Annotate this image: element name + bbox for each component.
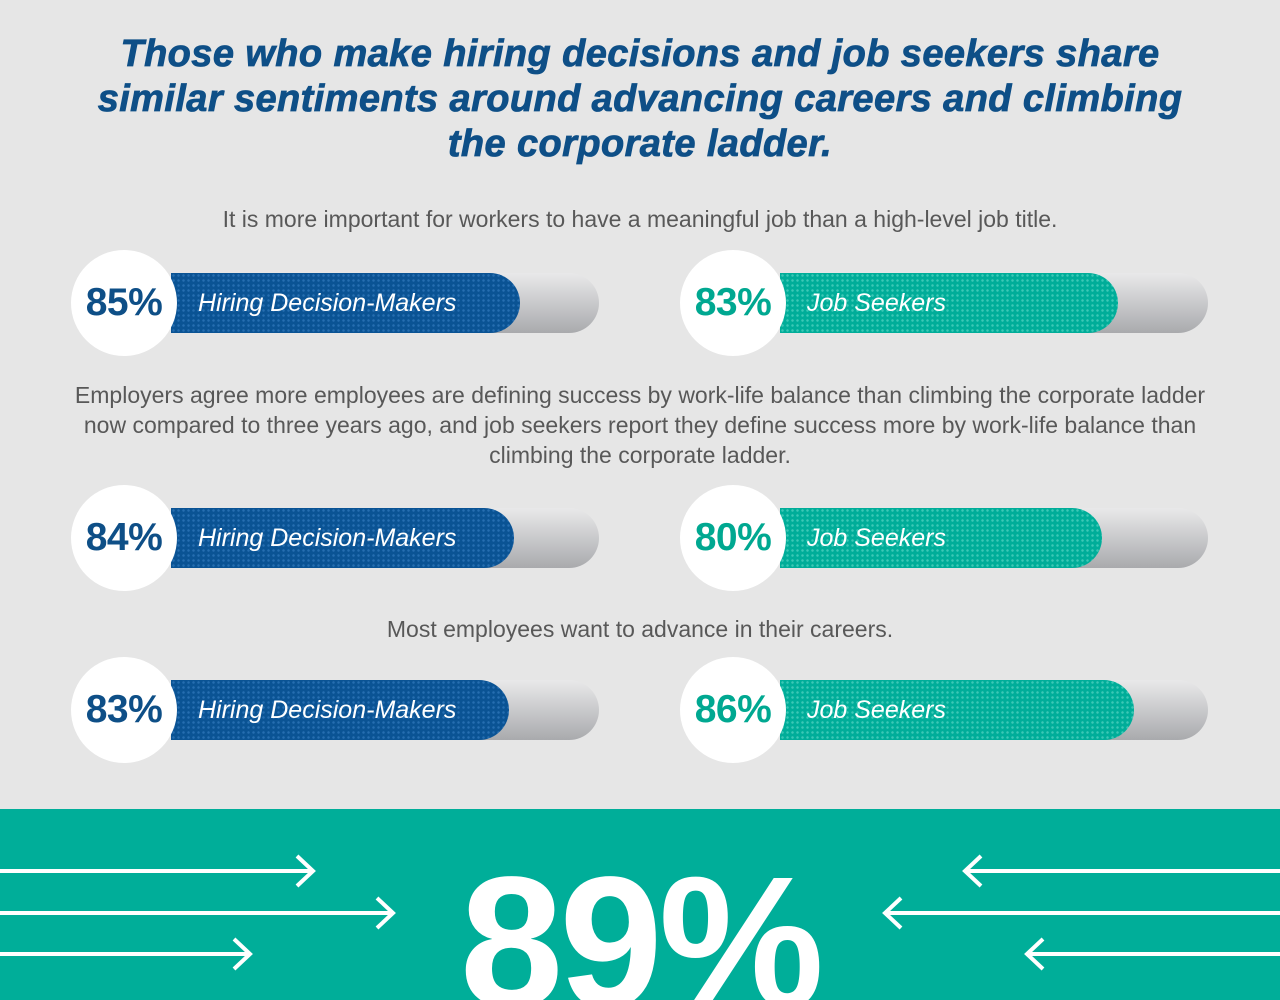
text: statement 2: climbing the corporate ladder.: [489, 442, 791, 468]
text: statement 1: It is more important for workers to have a meaningful job than a high-level job title.: [223, 206, 1057, 232]
text: statement 3: Most employees want to advance in their careers.: [387, 616, 893, 642]
stat: hiring 83%: [71, 657, 599, 763]
stat: seekers 83%: 83%: [695, 281, 771, 324]
text: statement 2: now compared to three years ago, and job seekers report they define success more by work-life balance than: [84, 412, 1196, 438]
title: Those who make hiring decisions and job seekers share: [120, 33, 1160, 75]
stat: seekers 83%: [680, 250, 1208, 356]
stat: seekers 83%: Job Seekers: [807, 289, 946, 317]
stat: hiring 85%: 85%: [86, 281, 162, 324]
stat: hiring 84%: [71, 485, 599, 591]
stat: seekers 80%: Job Seekers: [807, 524, 946, 552]
stat: hiring 84%: 84%: [86, 516, 162, 559]
stat: hiring 83%: Hiring Decision-Makers: [198, 696, 456, 724]
text: statement 2: [75, 382, 1205, 468]
arrows: [0, 854, 1280, 970]
title: the corporate ladder.: [448, 123, 832, 165]
panel: bottom band: [0, 809, 1280, 1000]
title: [98, 33, 1182, 165]
stat: hiring 84%: Hiring Decision-Makers: [198, 524, 456, 552]
stat: seekers 86%: [680, 657, 1208, 763]
stat: seekers 86%: 86%: [695, 688, 771, 731]
stat: hiring 85%: [71, 250, 599, 356]
stat: seekers 80%: [680, 485, 1208, 591]
title: similar sentiments around advancing careers and climbing: [98, 78, 1182, 120]
stat: hiring 83%: 83%: [86, 688, 162, 731]
stat: hiring 85%: Hiring Decision-Makers: [198, 289, 456, 317]
stat: seekers 86%: Job Seekers: [807, 696, 946, 724]
stat: seekers 80%: 80%: [695, 516, 771, 559]
text: statement 2: Employers agree more employees are defining success by work-life balance than climbing the corporate ladder: [75, 382, 1205, 408]
